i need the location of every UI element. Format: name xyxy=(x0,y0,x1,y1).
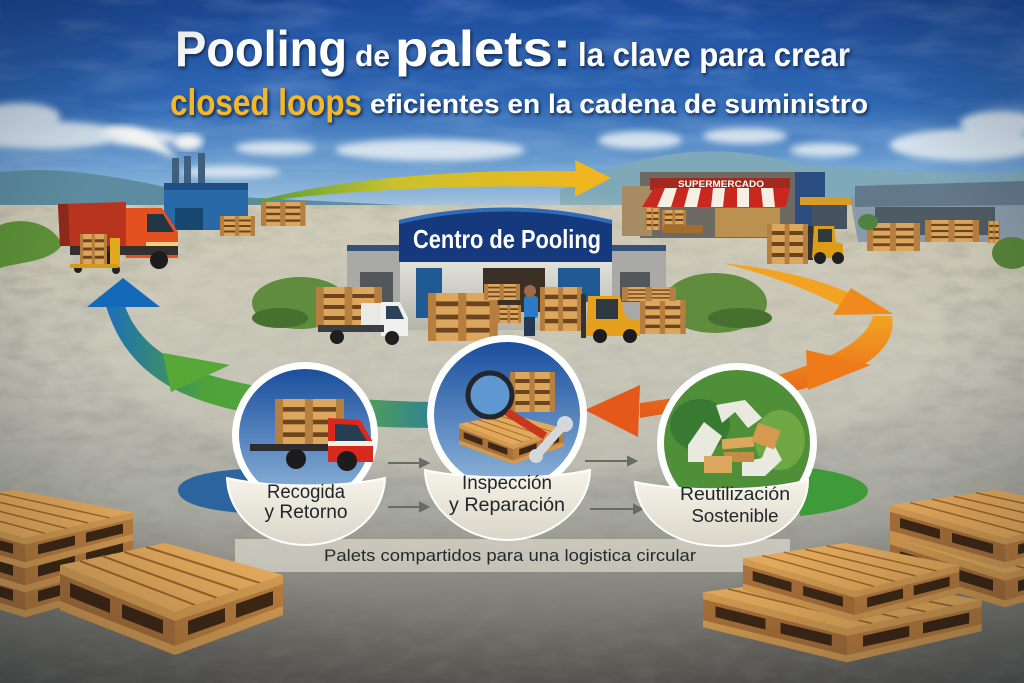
title: palets: xyxy=(395,21,571,77)
ground texture xyxy=(0,205,1024,683)
center sign text: Centro de Pooling xyxy=(413,224,601,254)
bottom ellipse loop xyxy=(178,466,868,516)
factory pallets xyxy=(220,202,305,236)
vegetation around pooling center xyxy=(252,273,772,333)
label: inspeccion: y Reparación xyxy=(449,495,565,516)
panel: inspeccion y reparacion xyxy=(425,335,590,540)
label: recogida xyxy=(227,478,385,545)
sky texture xyxy=(0,0,1024,170)
label: recogida: Recogida xyxy=(267,482,345,503)
caption text: Palets compartidos para una logistica circular xyxy=(324,546,696,565)
icon: recycling wood xyxy=(688,400,782,476)
label: inspeccion: Inspección xyxy=(462,473,552,494)
title: Pooling xyxy=(175,21,347,77)
title xyxy=(170,21,868,123)
light pavement patch xyxy=(90,205,950,475)
background sky xyxy=(0,0,1024,230)
yellow forklift with pallets xyxy=(767,224,844,264)
arrow: right orange xyxy=(585,263,893,437)
hills xyxy=(0,151,1024,270)
arrow: top yellow xyxy=(250,160,611,203)
small connector arrows xyxy=(388,457,642,513)
label: recogida: y Retorno xyxy=(264,502,348,523)
foreground pallets right xyxy=(703,490,1024,662)
foreground pallets left xyxy=(0,490,283,655)
arrow: left green blue xyxy=(87,278,445,428)
panel: reutilizacion sostenible xyxy=(635,363,817,546)
store sign: SUPERMERCADO xyxy=(678,179,764,190)
label: inspeccion xyxy=(425,470,590,540)
panel: recogida y retorno xyxy=(227,362,385,545)
title: eficientes en la cadena de suministro xyxy=(370,89,868,119)
caption band xyxy=(235,539,790,572)
title: la clave para crear xyxy=(578,36,850,73)
supermarket xyxy=(622,172,857,238)
ground xyxy=(0,205,1024,683)
factory xyxy=(100,126,248,230)
title: closed loops xyxy=(170,82,362,123)
left vegetation xyxy=(0,221,62,268)
icon: pallets magnifier wrench xyxy=(459,372,573,464)
title: de xyxy=(355,40,390,73)
red truck xyxy=(58,202,178,274)
label: reutilizacion: Sostenible xyxy=(692,506,778,526)
label: reutilizacion: Reutilización xyxy=(680,484,790,504)
Centro de Pooling building xyxy=(347,210,666,330)
clouds xyxy=(0,103,1024,178)
label: reutilizacion xyxy=(635,480,808,546)
center pallets and vehicles xyxy=(316,284,686,345)
icon: truck with pallets xyxy=(250,399,373,471)
warehouse right xyxy=(850,181,1024,269)
